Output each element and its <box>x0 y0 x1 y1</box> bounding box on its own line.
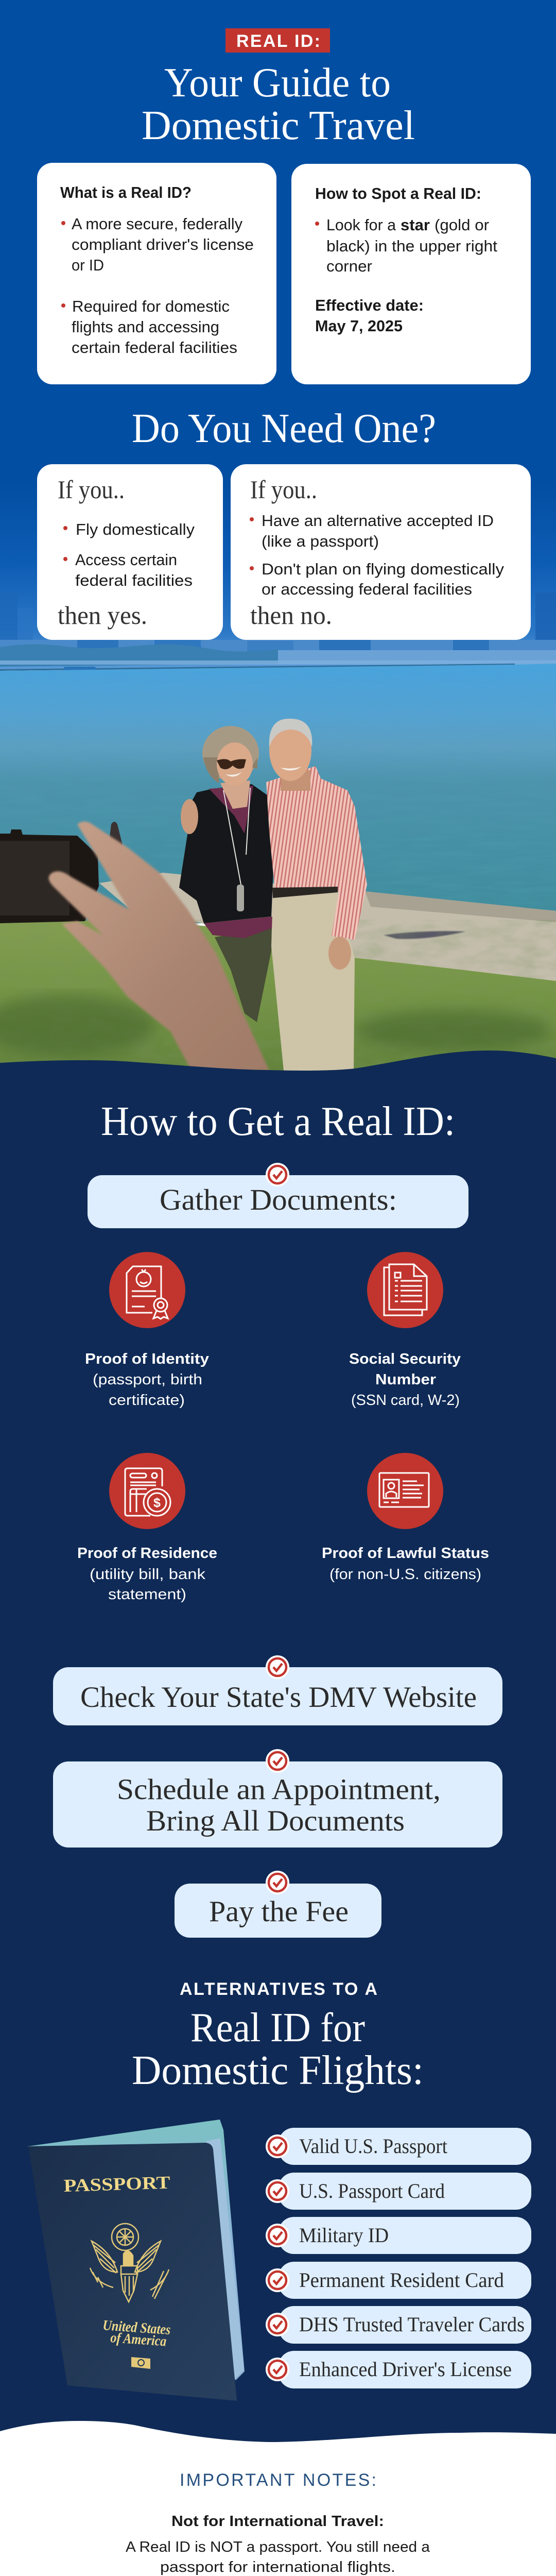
item: proof of identity: certificate) <box>109 1392 185 1409</box>
list: military ID: Military ID <box>299 2224 389 2247</box>
list: DHS trusted traveler cards <box>266 2306 531 2344</box>
icon: birth certificate <box>127 1266 168 1319</box>
grass <box>0 920 556 1077</box>
item: proof of residence: (utility bill, bank <box>90 1566 206 1583</box>
panel: how to spot a Real ID: May 7, 2025 <box>315 317 403 335</box>
item: proof of residence: Proof of Residence <box>77 1545 217 1562</box>
list: permanent resident card <box>266 2262 531 2299</box>
walkway <box>99 873 556 981</box>
camera <box>0 829 99 923</box>
item: proof of residence <box>77 1453 217 1603</box>
list: valid U.S. passport <box>266 2128 531 2165</box>
icon: utility bill with coin <box>125 1468 170 1516</box>
skyline <box>0 592 556 672</box>
list: enhanced driver's license: Enhanced Driver's License <box>299 2358 512 2381</box>
panel: how to spot a Real ID: How to Spot a Real ID: <box>315 184 481 202</box>
item: social security number: Social Security <box>349 1351 461 1367</box>
item: proof of identity: Proof of Identity <box>85 1351 209 1367</box>
list: U.S. passport card <box>266 2173 531 2210</box>
panel: if you, then yes: then yes. <box>58 601 147 630</box>
note: not for international travel: passport for international flights. <box>160 2559 395 2575</box>
chip symbol <box>131 2357 150 2369</box>
item: proof of residence: statement) <box>108 1586 186 1603</box>
heading: alternatives: ALTERNATIVES TO A <box>180 1979 377 1999</box>
item: social security number: (SSN card, W-2) <box>351 1392 460 1409</box>
panel: if you, then yes: Fly domestically <box>76 520 195 538</box>
panel: what is a Real ID: A more secure, federally <box>72 215 242 233</box>
grass shadows <box>0 994 551 1056</box>
list: permanent resident card: Permanent Resident Card <box>299 2268 504 2292</box>
heading: how to get a Real ID: How to Get a Real ID: <box>101 1099 455 1144</box>
step: schedule an appointment <box>53 1749 502 1848</box>
panel: how to spot a Real ID <box>291 164 531 384</box>
badge: Real ID <box>225 28 330 53</box>
panel: if you, then no <box>231 464 531 640</box>
note: not for international travel: A Real ID is NOT a passport. You still need a <box>126 2539 430 2555</box>
panel: what is a Real ID: compliant driver's license <box>72 235 254 253</box>
item: proof of identity: (passport, birth <box>93 1371 202 1388</box>
woman <box>179 726 275 1022</box>
item: proof of identity <box>85 1252 209 1409</box>
step: gather documents <box>88 1163 468 1228</box>
icon: ID card <box>379 1473 429 1507</box>
item: proof of residence: $ <box>153 1496 161 1510</box>
panel: if you, then no: Have an alternative accepted ID <box>262 512 494 530</box>
panel: if you, then yes: federal facilities <box>75 571 193 589</box>
item: proof of lawful status: (for non-U.S. citizens) <box>329 1566 481 1583</box>
panel: what is a Real ID <box>37 163 276 384</box>
note: not for international travel <box>126 2513 430 2575</box>
passport image: PASSPORT <box>63 2173 170 2196</box>
man <box>181 719 367 1071</box>
blue header background <box>0 0 556 670</box>
note: not for international travel: Not for International Travel: <box>171 2513 384 2530</box>
panel: if you, then yes <box>37 464 223 640</box>
step: check DMV website <box>53 1655 502 1725</box>
panel: what is a Real ID: or ID <box>72 256 104 274</box>
panel: if you, then no: Don't plan on flying domestically <box>262 560 505 578</box>
item: social security number: Number <box>375 1371 436 1388</box>
passport image: United States <box>102 2317 171 2338</box>
seal <box>90 2224 169 2302</box>
lake <box>0 664 556 923</box>
item: social security number <box>349 1252 461 1409</box>
foreground hand <box>49 821 269 1071</box>
heading: important notes: IMPORTANT NOTES: <box>180 2470 376 2490</box>
step: schedule an appointment: Bring All Documents <box>146 1805 405 1837</box>
step: pay the fee: Pay the Fee <box>209 1895 349 1928</box>
panel: if you, then no: (like a passport) <box>262 532 379 550</box>
item: proof of lawful status: Proof of Lawful Status <box>322 1545 489 1562</box>
step: check DMV website: Check Your State's DMV Website <box>80 1681 477 1714</box>
panel: if you, then yes: If you.. <box>58 475 125 504</box>
heading: alternatives <box>132 1979 424 2093</box>
list: U.S. passport card: U.S. Passport Card <box>299 2179 445 2202</box>
panel: how to spot a Real ID: star <box>401 216 430 234</box>
heading: alternatives: Domestic Flights: <box>132 2048 424 2093</box>
panel: if you, then yes: Access certain <box>75 551 177 569</box>
list: DHS trusted traveler cards: DHS Trusted Traveler Cards <box>299 2313 525 2336</box>
navy section background with wave <box>0 1050 556 2452</box>
passport image <box>28 2120 245 2401</box>
list: military ID <box>266 2217 531 2254</box>
panel: how to spot a Real ID: (gold or <box>435 216 489 234</box>
heading: do you need one: Do You Need One? <box>132 406 436 451</box>
list: valid U.S. passport: Valid U.S. Passport <box>299 2134 447 2158</box>
panel: if you, then no: or accessing federal facilities <box>262 580 472 598</box>
panel: what is a Real ID: What is a Real ID? <box>60 183 192 201</box>
panel: what is a Real ID: certain federal facilities <box>72 338 237 357</box>
panel: if you, then no: then no. <box>250 601 332 630</box>
panel: how to spot a Real ID: Look for a <box>326 216 396 234</box>
title: Domestic Travel <box>142 103 415 148</box>
photo: lake, skyline, couple and hand holding a camera <box>0 592 556 1077</box>
step: pay the fee <box>175 1871 381 1938</box>
icon: stacked document <box>384 1264 427 1315</box>
title: Your Guide to <box>164 60 391 106</box>
step: gather documents: Gather Documents: <box>160 1183 397 1216</box>
distant person <box>108 822 123 850</box>
list: enhanced driver's license <box>266 2351 531 2388</box>
panel: how to spot a Real ID: corner <box>326 257 372 275</box>
white footer background with wave <box>0 2421 556 2576</box>
step: schedule an appointment: Schedule an Appointment, <box>117 1773 441 1806</box>
passport image: of America <box>110 2330 167 2350</box>
panel: what is a Real ID: Required for domestic <box>72 297 230 315</box>
panel: what is a Real ID: flights and accessing <box>72 318 219 336</box>
panel: how to spot a Real ID: Effective date: <box>315 296 424 314</box>
item: proof of lawful status <box>322 1453 489 1583</box>
panel: how to spot a Real ID: black) in the upper right <box>326 237 497 255</box>
badge: Real ID: REAL ID: <box>236 31 320 51</box>
title <box>142 60 415 148</box>
heading: alternatives: Real ID for <box>190 2005 365 2050</box>
panel: if you, then no: If you.. <box>250 475 317 504</box>
